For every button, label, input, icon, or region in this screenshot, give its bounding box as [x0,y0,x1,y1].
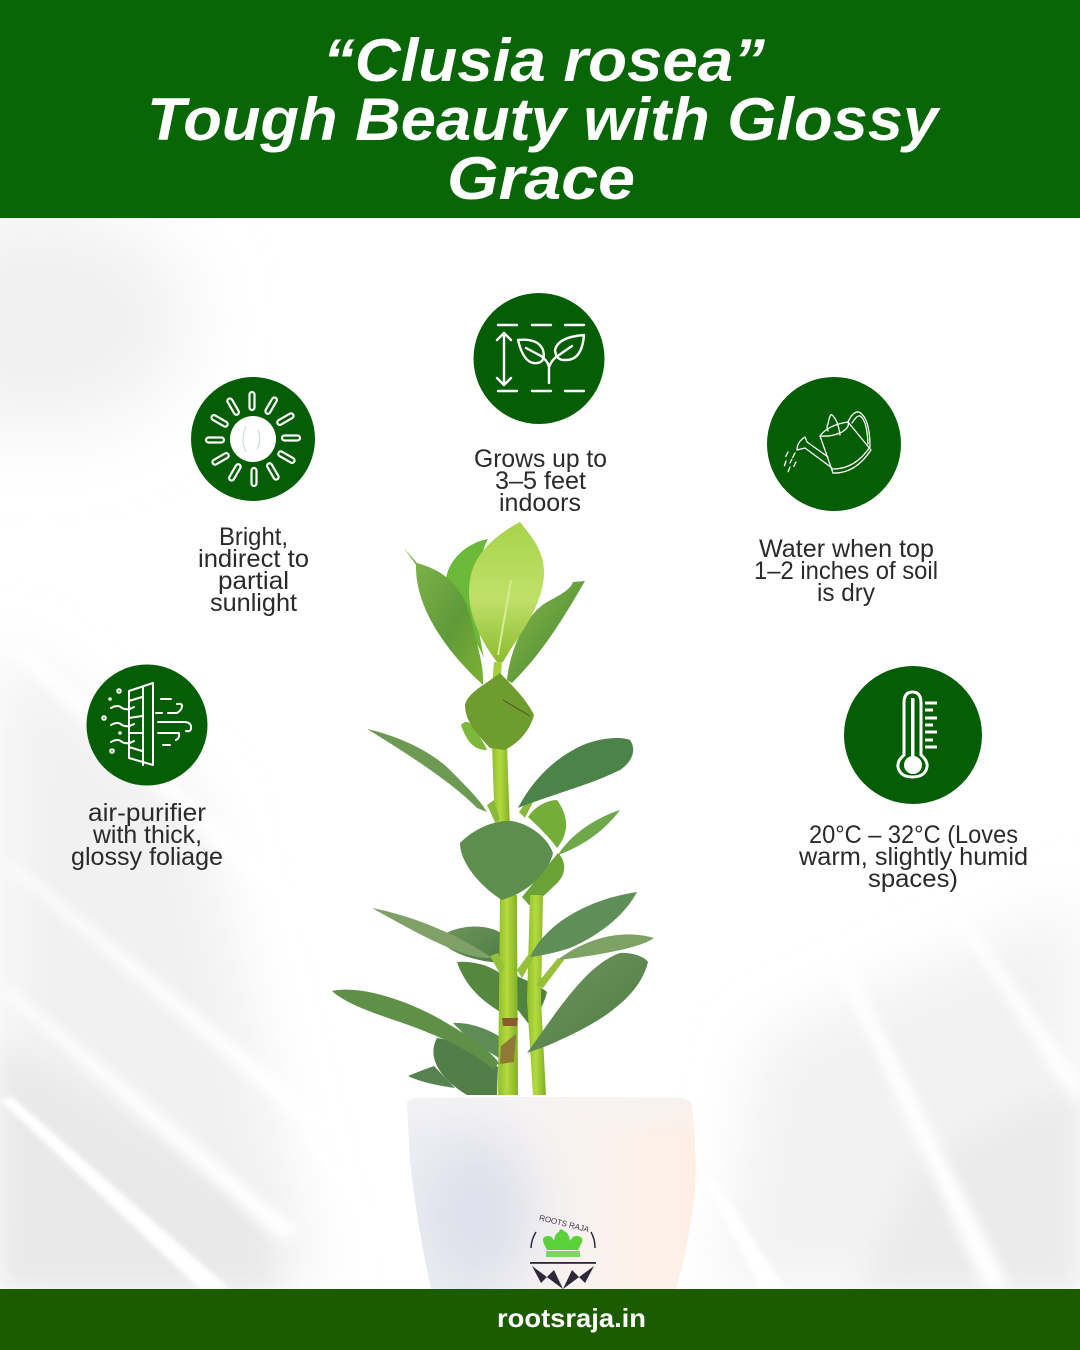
leaves behind the stems [446,539,488,658]
icon: plant height [474,293,604,424]
text: watering: 1–2 inches of soil [754,557,938,585]
round upper leaf [465,673,534,750]
stems [492,662,502,685]
pot logo: Roots Raja [530,1213,596,1289]
text: sunlight: Bright, [219,523,288,551]
icon: sun [191,377,315,501]
text: watering [754,535,938,607]
text: sunlight: partial [218,567,289,595]
right lower leaves [530,892,637,957]
icon: thermometer [844,666,982,804]
title: Tough Beauty with Glossy [147,86,941,153]
text: temperature: spaces) [868,865,958,893]
text: temperature: 20°C – 32°C (Loves [809,821,1018,849]
text: sunlight [198,523,309,617]
text: height: indoors [499,489,581,517]
title: “Clusia rosea” [323,27,765,94]
footer bar [0,1289,1080,1350]
text: air purifier [71,799,223,871]
text: air purifier: glossy foliage [71,843,223,871]
pot [400,1090,700,1295]
text: sunlight: indirect to [198,545,309,573]
background: silky white and grey streaks [0,210,1080,1289]
round lower leaf [460,821,553,900]
icon: watering can [767,377,901,511]
text: sunlight: sunlight [210,589,297,617]
middle leaves [367,729,487,812]
pot logo: Roots Raja: ROOTS RAJA [538,1213,591,1234]
title [147,27,941,212]
header banner [0,0,1080,218]
top leaves [404,548,483,685]
left lower leaves [372,908,492,958]
text: watering: is dry [817,579,875,607]
text: height [474,445,607,517]
text: watering: Water when top [759,535,934,563]
text: temperature: warm, slightly humid [798,843,1028,871]
text: air purifier: with thick, [92,821,202,849]
title: Grace [447,145,635,212]
text: temperature [798,821,1028,893]
icon: air purifier [86,664,208,786]
plant photo: Clusia rosea in white pot [332,522,700,1295]
text: height: Grows up to [474,445,607,473]
text: air purifier: air-purifier [88,799,206,827]
text: height: 3–5 feet [495,467,586,495]
footer website: rootsraja.in [497,1303,646,1333]
